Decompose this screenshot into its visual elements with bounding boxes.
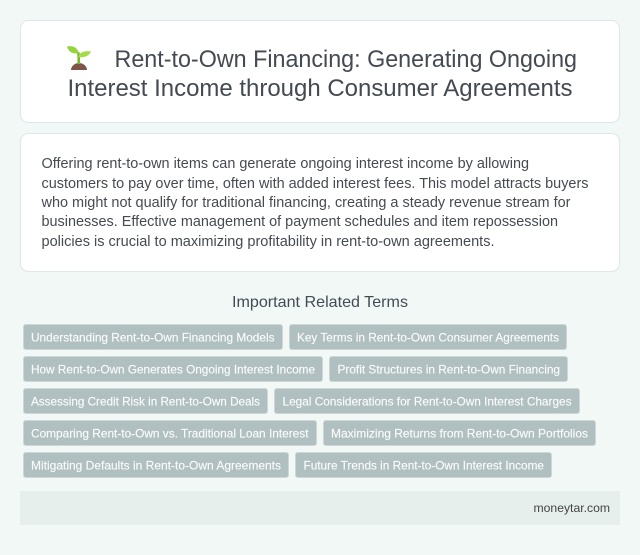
description text: Offering rent-to-own items can generate ongoing interest income by allowing <box>42 156 529 172</box>
tag <box>330 356 568 382</box>
heading: important related terms: Important Related Terms <box>232 294 408 311</box>
description text <box>40 156 589 250</box>
tag <box>24 324 282 350</box>
tag <box>290 324 566 350</box>
tag: Legal Considerations for Rent-to-Own Interest Charges <box>282 394 572 408</box>
title text: Rent-to-Own Financing: Generating Ongoing <box>114 46 577 73</box>
footer bar <box>20 491 620 525</box>
tag <box>324 420 596 446</box>
tag <box>24 452 288 478</box>
tag: Profit Structures in Rent-to-Own Financing <box>338 362 560 376</box>
tag <box>274 388 580 414</box>
tag: Maximizing Returns from Rent-to-Own Portfolios <box>331 426 588 440</box>
tag: Key Terms in Rent-to-Own Consumer Agreements <box>297 330 559 344</box>
tag: Assessing Credit Risk in Rent-to-Own Deals <box>31 394 260 408</box>
description text: customers to pay over time, often with added interest fees. This model attracts buyers <box>42 176 588 192</box>
tag: Comparing Rent-to-Own vs. Traditional Loan Interest <box>31 426 309 440</box>
description text: businesses. Effective management of payment schedules and item repossession <box>42 214 558 230</box>
tag <box>24 388 268 414</box>
tag: Future Trends in Rent-to-Own Interest Income <box>304 458 544 472</box>
description text: who might not qualify for traditional financing, creating a steady revenue stream for <box>40 195 571 211</box>
tag <box>296 452 552 478</box>
description text: policies is crucial to maximizing profitability in rent-to-own agreements. <box>42 234 494 250</box>
panel: description card <box>20 134 620 272</box>
tag: Understanding Rent-to-Own Financing Models <box>31 330 274 344</box>
panel: title card <box>20 20 620 122</box>
icon: sprout <box>67 46 91 70</box>
title text <box>68 46 577 102</box>
footer source text: moneytar.com <box>534 501 610 515</box>
tag list <box>24 324 596 478</box>
tag <box>24 420 316 446</box>
tag: Mitigating Defaults in Rent-to-Own Agreements <box>31 458 281 472</box>
tag <box>24 356 322 382</box>
tag: How Rent-to-Own Generates Ongoing Interest Income <box>31 362 315 376</box>
title text: Interest Income through Consumer Agreements <box>68 75 572 102</box>
